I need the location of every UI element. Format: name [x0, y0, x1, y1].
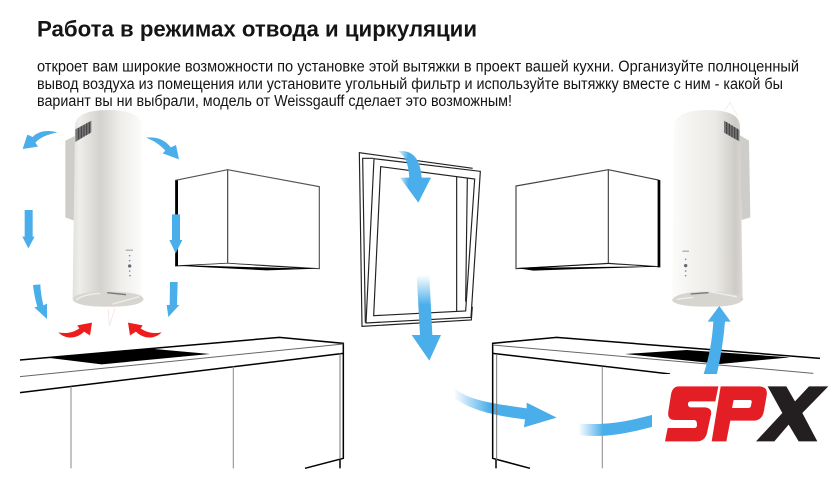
- hood vent: [75, 121, 91, 142]
- room airflow arrow: [455, 388, 557, 427]
- description text: вариант вы ни выбрали, модель от Weissgauff сделает это возможным!: [37, 93, 512, 110]
- upward airflow arrow: [703, 306, 731, 375]
- left wall cabinet: [175, 170, 319, 270]
- right countertop: [493, 337, 820, 468]
- window with airflow: [359, 151, 557, 427]
- red intake arrows: [58, 323, 162, 338]
- hood wall bracket: [739, 135, 750, 220]
- hood vent: [724, 121, 739, 141]
- hood cord: [108, 308, 115, 326]
- right wall cabinet: [516, 170, 660, 271]
- SPX logo: [665, 386, 828, 441]
- right countertop and arrows: [493, 306, 840, 474]
- left countertop: [20, 337, 343, 468]
- hood body: [672, 110, 743, 307]
- hood wall bracket: [65, 136, 75, 221]
- lower airflow arrow: [578, 415, 653, 436]
- window outflow arrow: [412, 275, 441, 361]
- title: Работа в режимах отвода и циркуляции: [37, 16, 477, 42]
- logo backing: [652, 374, 840, 474]
- logo letter S: [665, 386, 718, 441]
- exhaust airflow arrows: [22, 131, 182, 319]
- right hood: [672, 103, 750, 307]
- window inflow arrow: [397, 151, 431, 203]
- induction hob: [625, 350, 790, 364]
- left hood: [65, 110, 144, 326]
- logo letter X: [756, 386, 828, 441]
- induction hob: [47, 349, 210, 364]
- logo letter P: [712, 386, 767, 441]
- hood controls: [682, 251, 689, 276]
- hood controls: [126, 250, 133, 276]
- left scene: exhaust mode: [20, 110, 343, 468]
- hood body: [73, 110, 142, 307]
- right scene: recirculation mode: [516, 103, 750, 307]
- description text: вывод воздуха из помещения или установите угольный фильтр и используйте вытяжку вместе с ним - какой бы: [37, 76, 783, 93]
- description text: откроет вам широкие возможности по установке этой вытяжки в проект вашей кухни. Организуйте полноценный: [37, 59, 799, 76]
- description text: [37, 59, 799, 110]
- hood underside: [672, 292, 743, 307]
- window frame: [359, 153, 480, 326]
- hood underside: [73, 292, 144, 307]
- hood cord: [725, 103, 738, 117]
